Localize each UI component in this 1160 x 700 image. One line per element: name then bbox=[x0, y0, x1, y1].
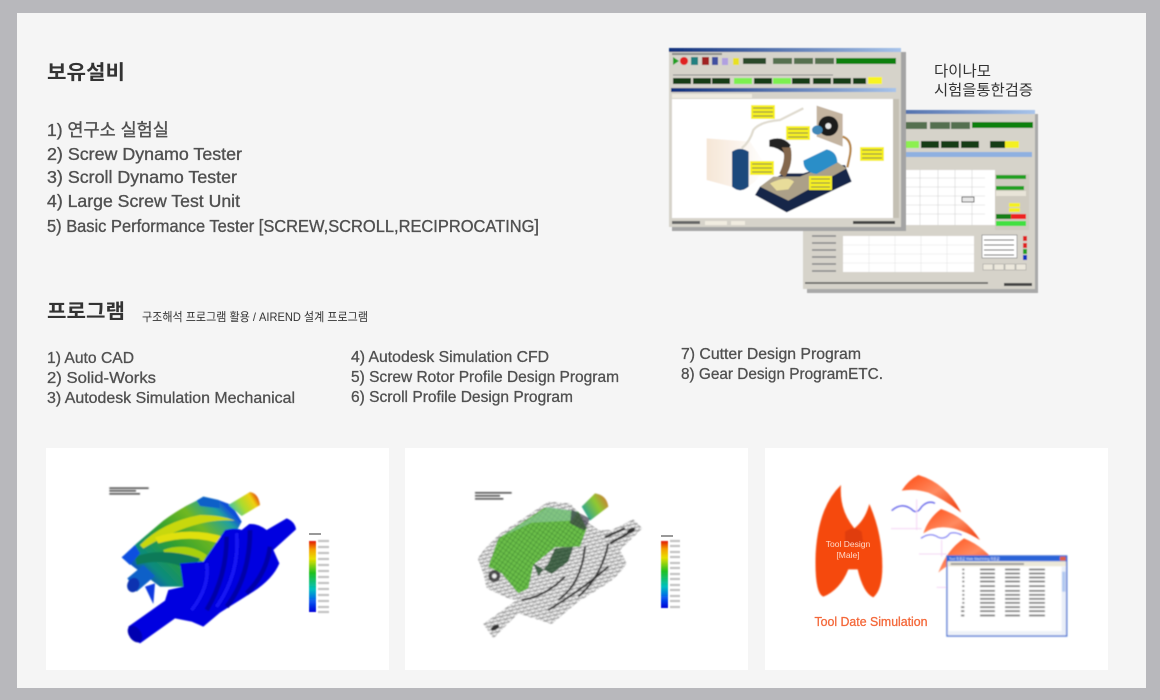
screenshot: back tester window bbox=[803, 110, 1038, 293]
text block: equipment list: 3) Scroll Dynamo Tester bbox=[47, 167, 237, 187]
text block: program subtitle: 구조해석 프로그램 활용 / AIREND 설계 프로그램 bbox=[142, 310, 368, 324]
small boss bbox=[127, 565, 155, 592]
screenshot: front tester window bbox=[669, 48, 906, 231]
text block: equipment list: 2) Screw Dynamo Tester bbox=[47, 144, 242, 164]
label: Tool Design (Male): Tool Design bbox=[826, 539, 870, 549]
yellow labels bbox=[750, 105, 884, 190]
annotation text bbox=[109, 487, 149, 495]
panel: rotor mesh simulation bbox=[405, 448, 748, 670]
text block: program list 3: 7) Cutter Design Program bbox=[681, 346, 861, 363]
annotation text bbox=[475, 492, 512, 500]
text block: program list 1 bbox=[47, 350, 295, 407]
text block: equipment list: 1) 연구소 실험실 bbox=[47, 120, 169, 140]
text block: equipment list bbox=[47, 120, 539, 236]
text block: program list 2: 6) Scroll Profile Design Program bbox=[351, 389, 573, 406]
legend color bar bbox=[661, 541, 668, 608]
label: Tool Design (Male) bbox=[826, 539, 870, 560]
caption: dynamo test verification bbox=[934, 63, 1033, 99]
blades bbox=[902, 475, 961, 512]
status buttons bbox=[673, 77, 882, 84]
male rotor (blue) bbox=[128, 518, 296, 643]
text block: program list 2 bbox=[351, 349, 619, 406]
text block: program list 1: 1) Auto CAD bbox=[47, 350, 134, 367]
panel: tool data simulation bbox=[765, 448, 1108, 670]
text block: equipment list: 5) Basic Performance Tester [SCREW,SCROLL,RECIPROCATING] bbox=[47, 216, 539, 236]
text block: program list 1: 2) Solid-Works bbox=[47, 370, 156, 387]
panel: rotor stress simulation bbox=[46, 448, 389, 670]
machine diagram bbox=[707, 106, 852, 212]
mesh body bbox=[478, 502, 642, 638]
label: Tool Design (Male): [Male] bbox=[836, 550, 860, 560]
text block: program list 1: 3) Autodesk Simulation Mechanical bbox=[47, 390, 295, 407]
text block: equipment list: 4) Large Screw Test Unit bbox=[47, 191, 240, 211]
panel: tool data simulation: Tool 좌표값 Male Machining 좌표값 bbox=[949, 556, 1000, 561]
label: Tool Date Simulation: Tool Date Simulation bbox=[814, 614, 928, 629]
caption: dynamo test verification: 시험을통한검증 bbox=[934, 82, 1033, 99]
caption: dynamo test verification: 다이나모 bbox=[934, 63, 991, 80]
heading: 보유설비: 보유설비 bbox=[47, 61, 125, 84]
data window bbox=[947, 556, 1067, 636]
cutter curves bbox=[892, 502, 935, 512]
toolbar icons bbox=[673, 57, 739, 65]
nozzle bbox=[228, 492, 260, 516]
female rotor (heat) bbox=[122, 497, 242, 587]
text block: program list 3: 8) Gear Design ProgramETC. bbox=[681, 366, 883, 383]
text block: program list 2: 5) Screw Rotor Profile Design Program bbox=[351, 369, 619, 386]
text block: program list 2: 4) Autodesk Simulation CFD bbox=[351, 349, 549, 366]
heading: 프로그램: 프로그램 bbox=[47, 300, 125, 323]
legend color bar bbox=[309, 541, 316, 612]
tool design shape bbox=[815, 485, 882, 597]
text block: program list 3 bbox=[681, 346, 883, 383]
